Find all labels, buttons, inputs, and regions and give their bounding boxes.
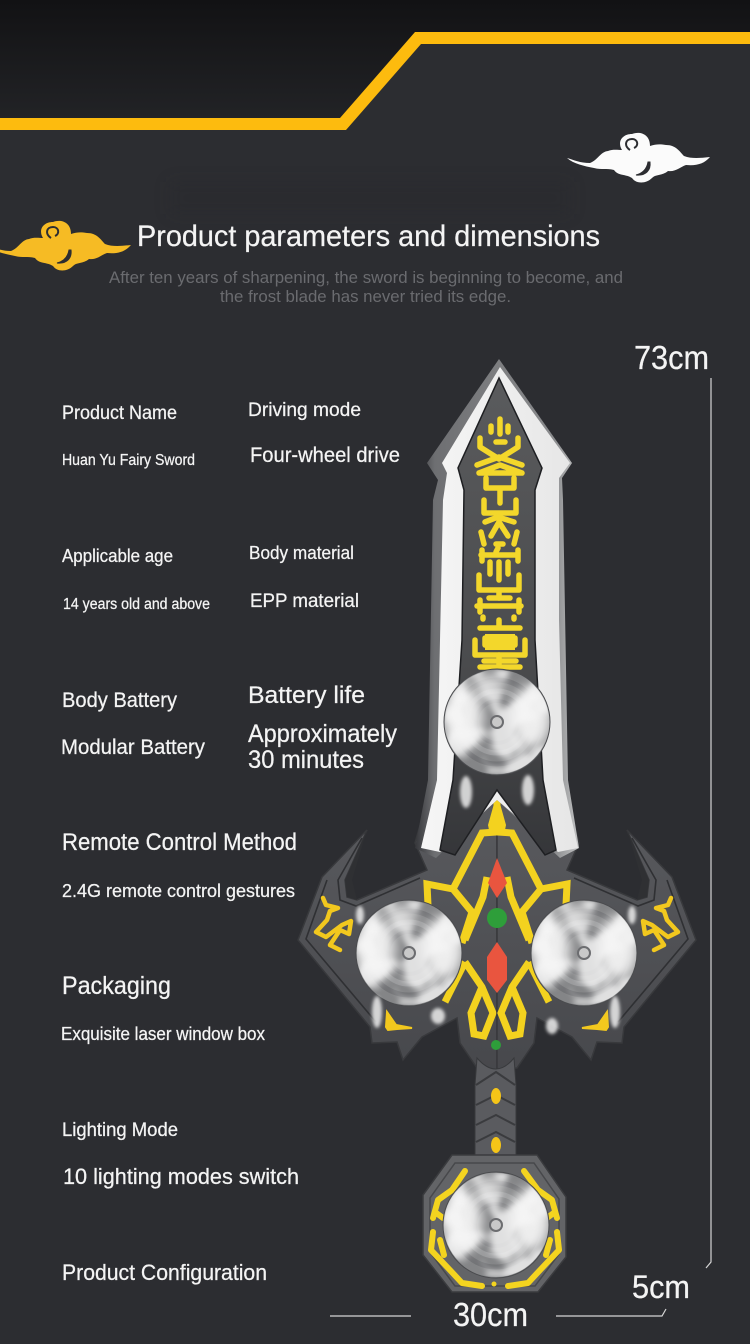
spec: product name label: Product Name [62, 403, 177, 424]
spec: battery life value: 30 minutes [248, 746, 364, 774]
sword illustration [298, 359, 696, 1292]
left fan disc [355, 900, 463, 1006]
blade bevel [415, 359, 579, 858]
icon: gold cloud [0, 221, 131, 270]
spec: remote control label: Remote Control Method [62, 829, 297, 856]
blade centre panel [440, 378, 556, 855]
width dimension line right [556, 1309, 666, 1316]
spec: driving mode value: Four-wheel drive [250, 444, 400, 467]
right fan disc [530, 900, 638, 1006]
subtitle [109, 268, 623, 306]
spec: modular battery: Modular Battery [61, 736, 205, 759]
sword handle [475, 1058, 516, 1160]
width label: 30cm [453, 1296, 528, 1333]
sword blade [415, 359, 579, 858]
red gems [487, 858, 507, 993]
thickness label: 5cm [632, 1269, 690, 1305]
green gems [487, 908, 507, 1050]
spec: product configuration label: Product Configuration [62, 1260, 267, 1285]
title: Product parameters and dimensions [137, 220, 600, 253]
pommel fan disc [442, 1172, 550, 1278]
gold filigree [431, 1171, 559, 1286]
spec: remote control value: 2.4G remote control gestures [62, 881, 295, 901]
icon: white cloud [567, 133, 710, 182]
width dimension line left [330, 1315, 411, 1317]
spec: packaging label: Packaging [62, 972, 171, 1000]
spec: applicable age label: Applicable age [62, 546, 173, 566]
top dark band [0, 0, 750, 119]
subtitle: After ten years of sharpening, the sword is beginning to become, and [109, 268, 623, 287]
height label: 73cm [634, 339, 709, 376]
spec: lighting mode label: Lighting Mode [62, 1120, 178, 1141]
spec: body material label: Body material [249, 543, 354, 563]
spec: applicable age value: 14 years old and above [63, 596, 210, 613]
spec: driving mode label: Driving mode [248, 400, 361, 421]
smoke wisps [356, 775, 636, 1034]
sword guard [298, 780, 696, 1070]
subtitle: the frost blade has never tried its edge. [220, 287, 511, 306]
yellow rune column [475, 419, 525, 668]
sword pommel [423, 1155, 566, 1292]
spec: packaging value: Exquisite laser window box [61, 1024, 265, 1044]
faint ghost heading [170, 182, 570, 214]
blade fan disc [443, 669, 551, 775]
spec: battery life value [248, 720, 397, 774]
height dimension line [706, 378, 711, 1268]
spec: body battery: Body Battery [62, 689, 177, 712]
spec: body material value: EPP material [250, 591, 359, 612]
spec: battery life label: Battery life [248, 682, 365, 709]
gold studs [491, 1088, 501, 1153]
yellow angled stripe [0, 32, 750, 130]
blade white edge [421, 367, 578, 852]
spec: battery life value: Approximately [248, 720, 397, 748]
spec: lighting mode value: 10 lighting modes switch [63, 1164, 299, 1189]
spec: product name value: Huan Yu Fairy Sword [62, 452, 195, 469]
